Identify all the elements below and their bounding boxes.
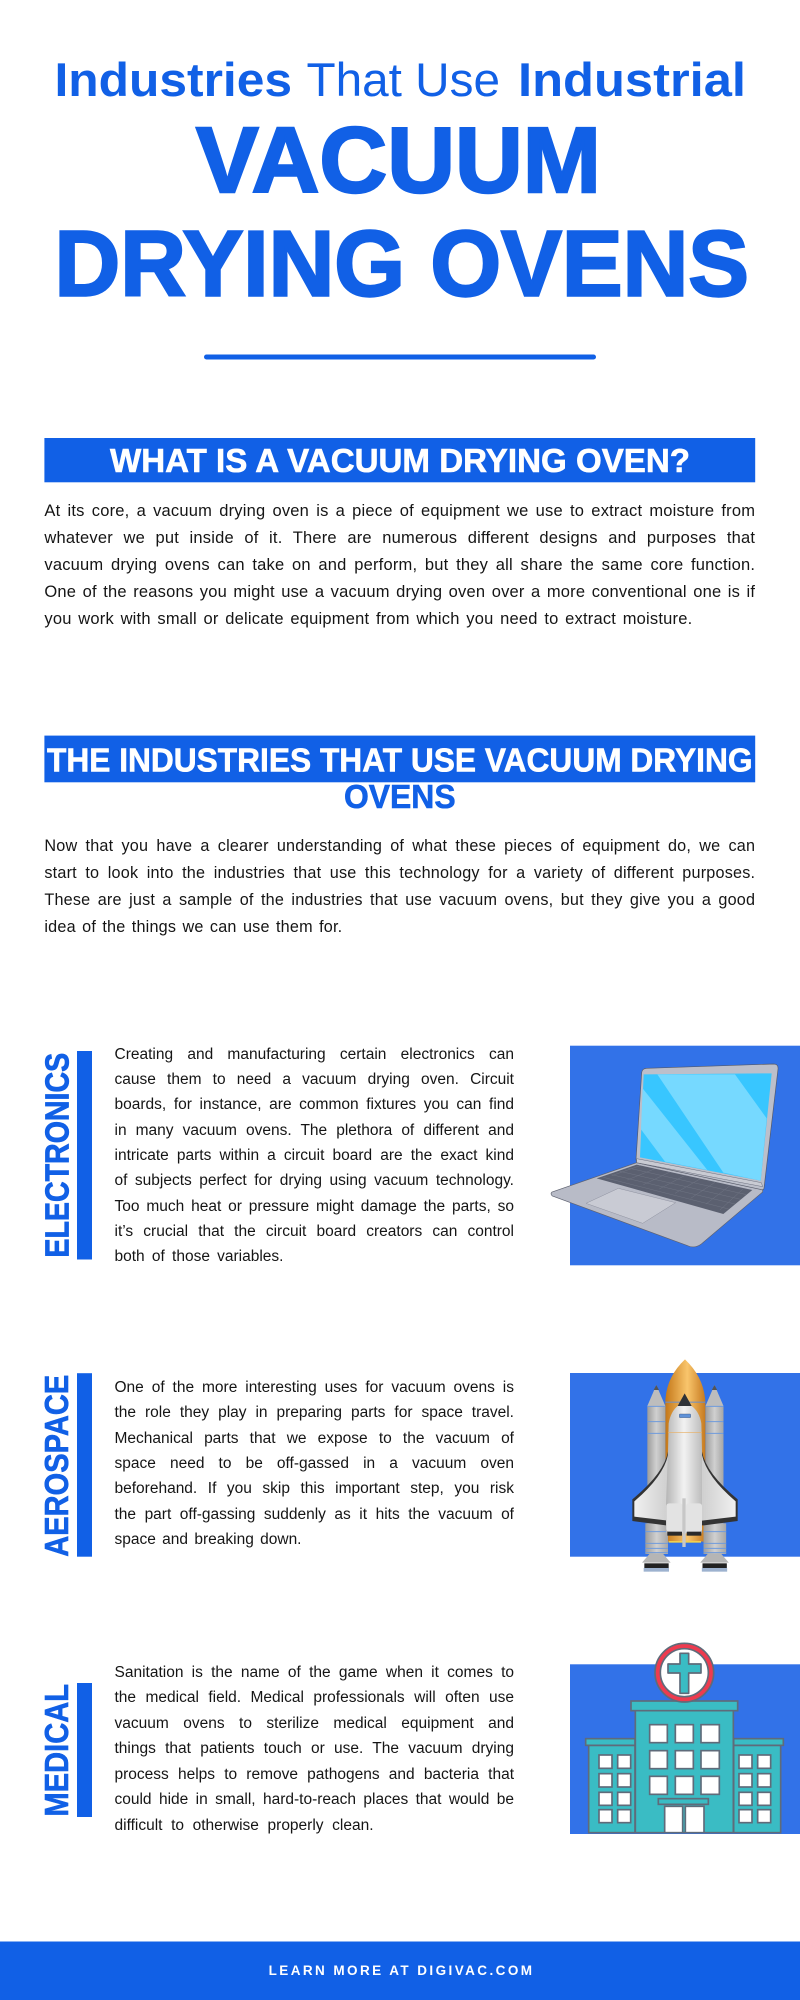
text block: aerospace: the part off-gassing suddenly as it hits the vacuum of <box>114 1506 514 1523</box>
text block: electronics: it’s crucial that the circuit board creators can control <box>114 1223 514 1240</box>
text block: aerospace: One of the more interesting uses for vacuum ovens is <box>114 1379 514 1396</box>
title line 1: That Use <box>306 54 500 107</box>
text block: medical: vacuum ovens to sterilize medical equipment and <box>114 1715 514 1732</box>
text block: electronics: cause them to need a vacuum drying oven. Circuit <box>114 1071 514 1088</box>
side label: aerospace: AEROSPACE <box>38 1375 75 1557</box>
right booster <box>700 1385 729 1572</box>
text block: electronics: in many vacuum ovens. The plethora of different and <box>114 1122 514 1139</box>
text block: aerospace <box>114 1379 514 1548</box>
text block: aerospace: Mechanical parts that we expose to the vacuum of <box>114 1430 514 1447</box>
text block: industries intro: Now that you have a clearer understanding of what these pieces of equipment do, we can <box>44 837 755 855</box>
windows and doors <box>599 1725 771 1833</box>
wings <box>632 1452 668 1525</box>
text block: medical: the medical field. Medical professionals will often use <box>114 1689 514 1706</box>
footer banner: LEARN MORE AT DIGIVAC.COM <box>269 1963 532 1978</box>
text block: what is a vacuum drying oven: whatever we put inside of it. There are numerous different designs and purposes that <box>44 529 755 547</box>
text block: what is a vacuum drying oven <box>44 502 755 628</box>
image: laptop <box>551 1046 800 1265</box>
fuselage <box>666 1406 702 1533</box>
divider rule <box>204 354 596 360</box>
title line 1: Industries <box>54 54 292 107</box>
text block: what is a vacuum drying oven: vacuum drying ovens can take on and perform, but they all share the same core function. <box>44 556 755 574</box>
text block: aerospace: space and breaking down. <box>114 1531 302 1548</box>
footer banner <box>0 1942 800 2000</box>
text block: what is a vacuum drying oven: One of the reasons you might use a vacuum drying oven over a more conventional one is if <box>44 583 755 601</box>
side label: medical: MEDICAL <box>38 1684 75 1816</box>
title line 1 <box>54 54 746 107</box>
text block: medical <box>114 1664 514 1834</box>
left booster <box>642 1385 671 1572</box>
title line 2: VACUUM: VACUUM <box>196 108 601 212</box>
text block: medical: could hide in small, hard-to-reach places that would be <box>114 1791 514 1808</box>
text block: electronics: of subjects perfect for drying using vacuum technology. <box>114 1172 514 1189</box>
text block: industries intro <box>44 837 755 936</box>
screen <box>640 1073 772 1181</box>
text block: medical: Sanitation is the name of the game when it comes to <box>114 1664 514 1681</box>
text block: what is a vacuum drying oven: At its core, a vacuum drying oven is a piece of equipment we use to extract moisture from <box>44 502 755 520</box>
text block: industries intro: start to look into the industries that use this technology for a variety of different purposes. <box>44 864 755 882</box>
keyboard <box>597 1165 752 1214</box>
side label: medical <box>38 1683 92 1817</box>
side label: electronics: ELECTRONICS <box>40 1053 77 1258</box>
image: space shuttle <box>570 1359 800 1572</box>
title <box>54 54 749 316</box>
text block: electronics: both of those variables. <box>114 1248 284 1265</box>
side label: electronics <box>40 1051 92 1260</box>
title line 3: DRYING OVENS: DRYING OVENS <box>54 212 749 316</box>
image: hospital <box>570 1643 800 1834</box>
external tank <box>665 1359 705 1542</box>
red cross sign <box>655 1643 714 1702</box>
text block: electronics: intricate parts within a circuit board are the exact kind <box>114 1147 514 1164</box>
heading: the industries that use vacuum drying ovens: THE INDUSTRIES THAT USE VACUUM DRYING <box>47 743 752 780</box>
wings and main block <box>586 1701 783 1833</box>
engine pods <box>666 1503 683 1532</box>
text block: medical: difficult to otherwise properly clean. <box>114 1817 374 1834</box>
text block: aerospace: the role they play in preparing parts for space travel. <box>114 1404 514 1421</box>
lid <box>636 1064 778 1190</box>
heading: the industries that use vacuum drying ovens: OVENS <box>344 779 456 816</box>
text block: what is a vacuum drying oven: you work with small or delicate equipment from which you need to extract moisture. <box>44 610 692 628</box>
text block: electronics <box>114 1046 514 1265</box>
text block: industries intro: idea of the things we can use them for. <box>44 918 342 936</box>
text block: aerospace: space need to be off-gassed in a vacuum oven <box>114 1455 514 1472</box>
text block: medical: process helps to remove pathogens and bacteria that <box>114 1766 514 1783</box>
text block: industries intro: These are just a sample of the industries that use vacuum ovens, but they give you a good <box>44 891 755 909</box>
heading: the industries that use vacuum drying ovens <box>44 736 755 816</box>
trackpad <box>586 1188 676 1223</box>
base <box>551 1163 763 1247</box>
text block: electronics: boards, for instance, are common fixtures you can find <box>114 1096 514 1113</box>
side label: aerospace <box>38 1373 92 1557</box>
text block: aerospace: beforehand. If you skip this important step, you risk <box>114 1480 514 1497</box>
heading: what is a vacuum drying oven: WHAT IS A VACUUM DRYING OVEN? <box>110 443 690 480</box>
heading: what is a vacuum drying oven <box>44 438 755 482</box>
title line 1: Industrial <box>518 54 746 107</box>
hinge <box>637 1159 763 1187</box>
text block: electronics: Too much heat or pressure might damage the parts, so <box>114 1198 514 1215</box>
text block: medical: things that patients touch or use. The vacuum drying <box>114 1740 514 1757</box>
tail fin <box>682 1498 686 1547</box>
text block: electronics: Creating and manufacturing certain electronics can <box>114 1046 514 1063</box>
